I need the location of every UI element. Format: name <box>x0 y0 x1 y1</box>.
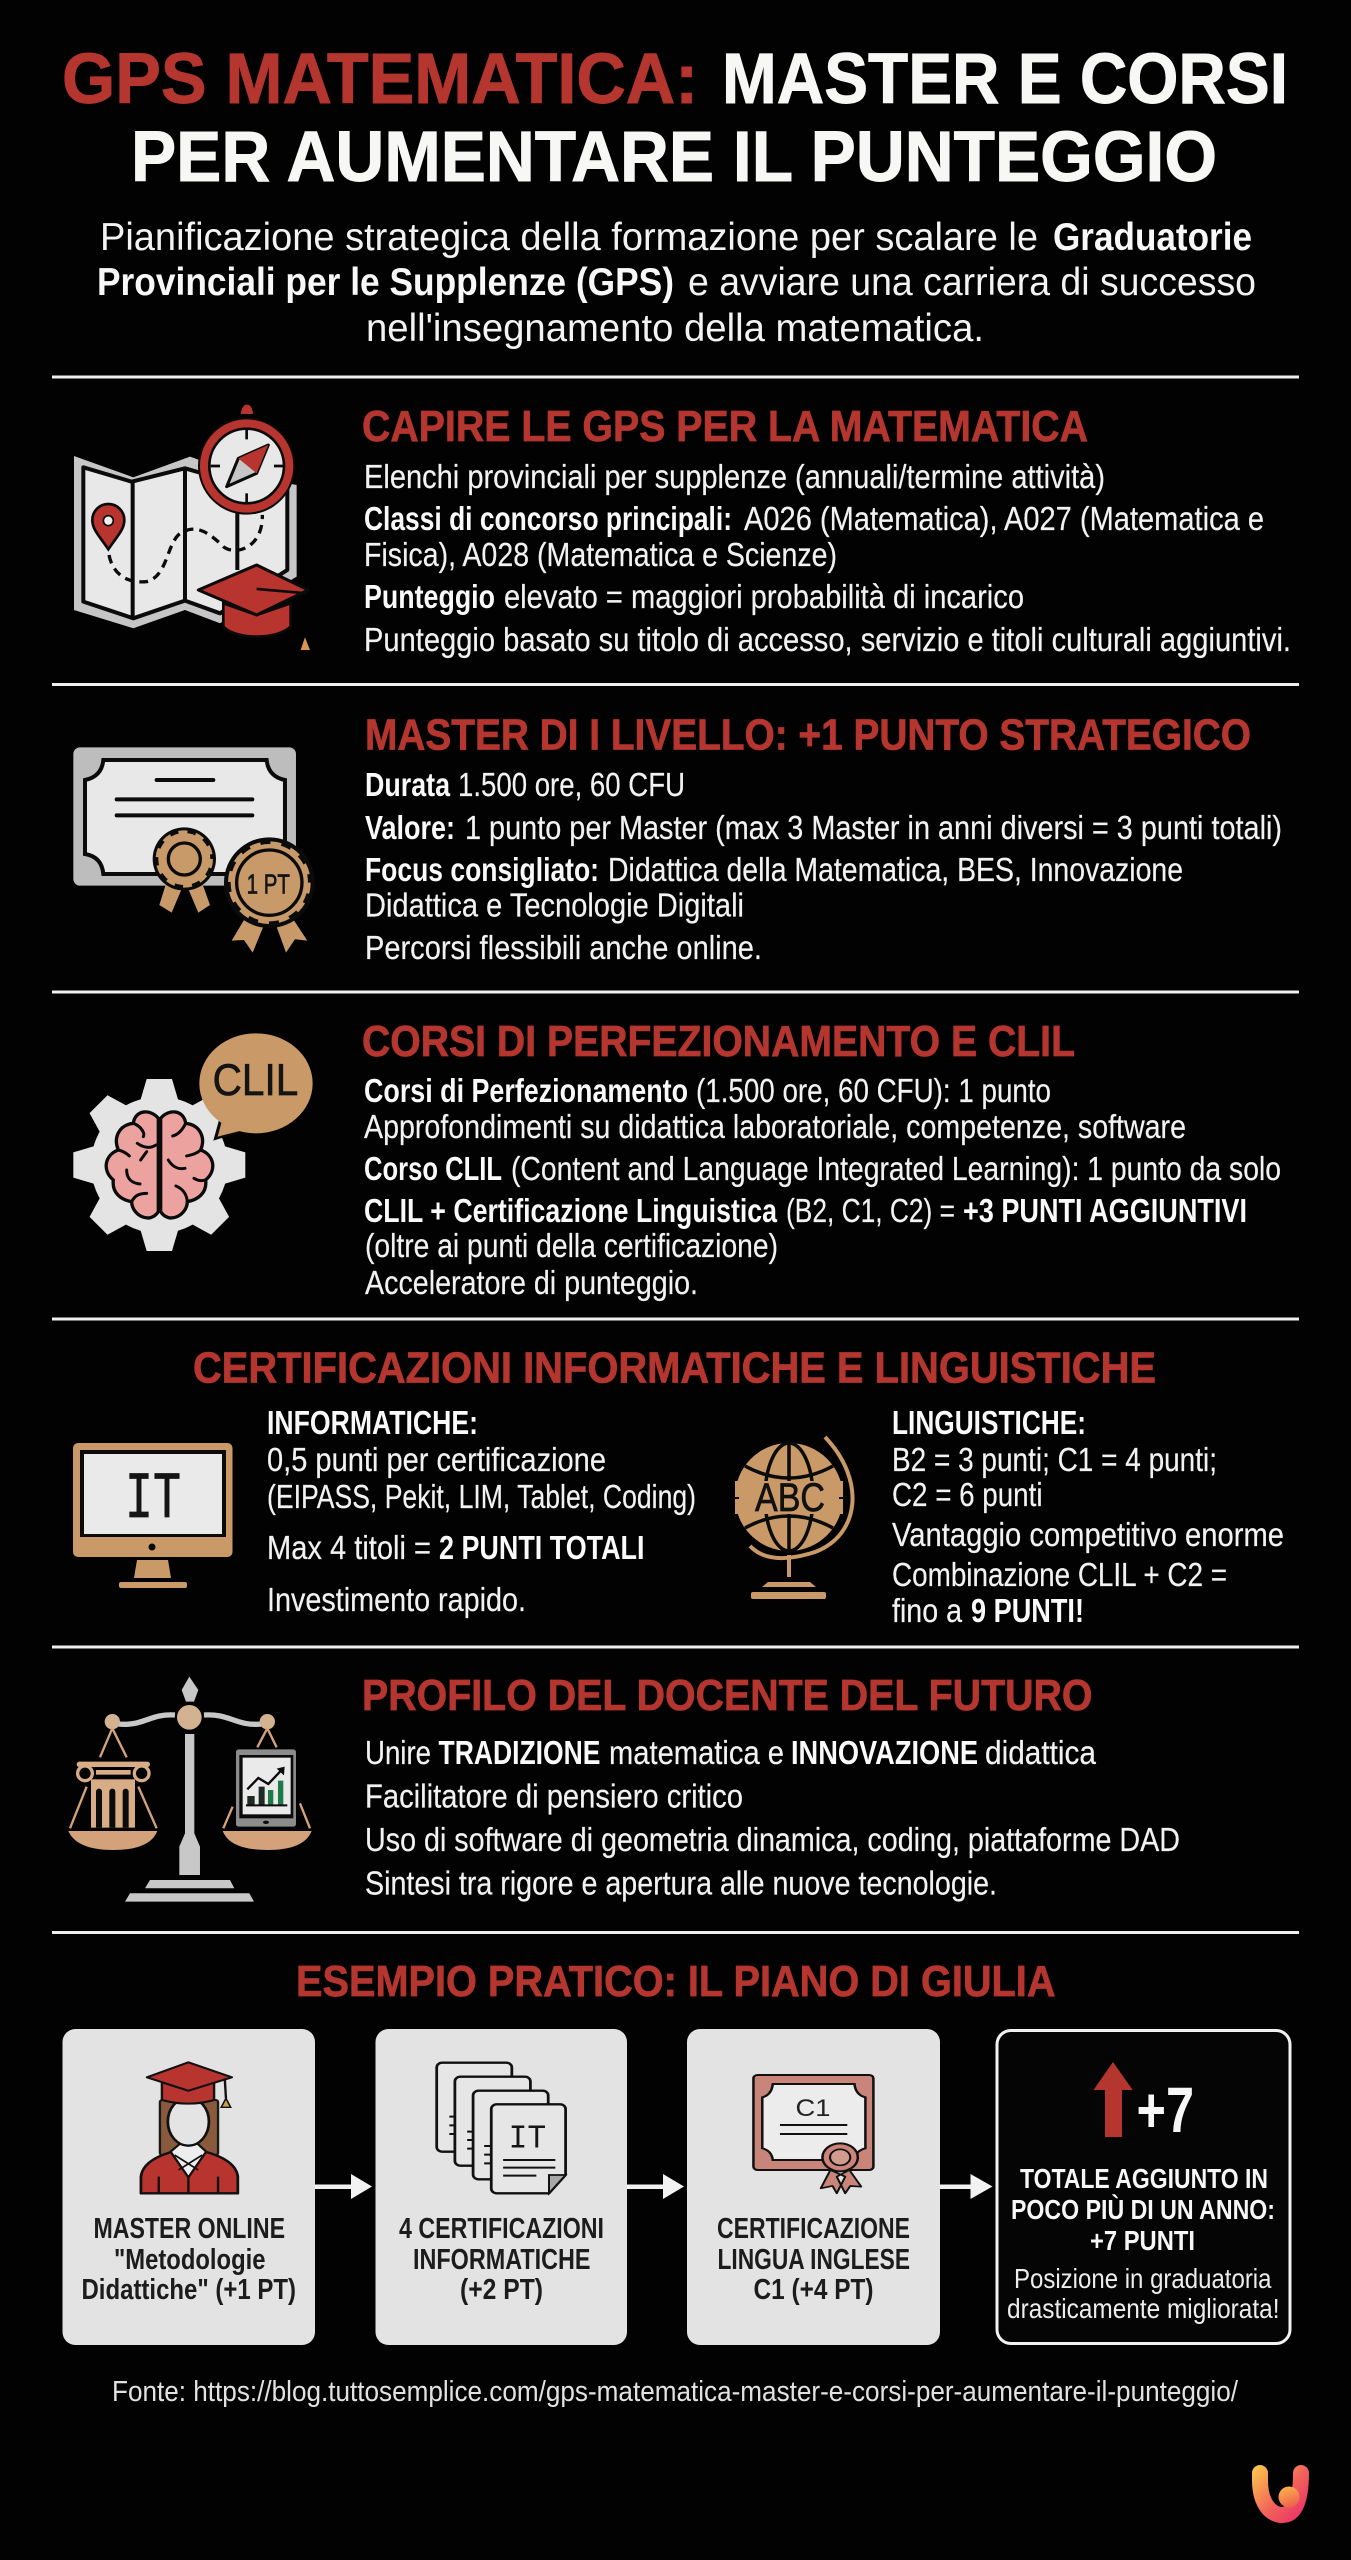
icon: graduate <box>141 2062 238 2193</box>
arrow <box>627 2174 684 2199</box>
text block: Approfondimenti su didattica laboratoriale, competenze, software <box>364 1108 1186 1145</box>
icon: certificate with seals: 1 PT <box>247 868 290 899</box>
total text: POCO PIÙ DI UN ANNO: <box>1011 2194 1275 2225</box>
text block: Didattica e Tecnologie Digitali <box>365 886 744 924</box>
card label: "Metodologie <box>114 2244 266 2276</box>
text block: informatiche: Max 4 titoli = <box>267 1529 431 1566</box>
heading: ESEMPIO PRATICO: IL PIANO DI GIULIA <box>296 1957 1056 2006</box>
icon: stacked documents: IT <box>509 2120 546 2157</box>
title: PER AUMENTARE IL PUNTEGGIO <box>131 118 1217 197</box>
text block: linguistiche: fino a <box>892 1592 963 1629</box>
text block: Elenchi provinciali per supplenze (annuali/termine attività) <box>364 458 1105 495</box>
text block: Durata <box>365 766 451 803</box>
text block: Classi di concorso principali: <box>364 500 732 537</box>
text block: CLIL + Certificazione Linguistica <box>364 1192 778 1229</box>
text block: matematica e <box>609 1734 784 1771</box>
icon: C1 certificate: C1 <box>796 2094 830 2121</box>
panel: corsi di perfezionamento e CLIL <box>73 1017 1281 1301</box>
text block: informatiche <box>267 1404 696 1618</box>
subtitle: e avviare una carriera di successo <box>688 261 1256 304</box>
text block: 1.500 ore, 60 CFU <box>458 766 685 803</box>
text block: linguistiche <box>892 1404 1284 1629</box>
text block: A026 (Matematica), A027 (Matematica e <box>744 500 1264 537</box>
text block: +3 PUNTI AGGIUNTIVI <box>963 1192 1247 1229</box>
subtitle: Pianificazione strategica della formazione per scalare le <box>100 216 1038 259</box>
icon: certificate with seals <box>73 747 315 953</box>
icon: brain in gear with CLIL bubble <box>73 1033 313 1251</box>
text block: informatiche: 2 PUNTI TOTALI <box>439 1529 644 1566</box>
source line: Fonte: https://blog.tuttosemplice.com/gps-matematica-master-e-corsi-per-aumentare-il-punteggio/ <box>112 2376 1239 2408</box>
text block: Sintesi tra rigore e apertura alle nuove tecnologie. <box>365 1864 997 1902</box>
card label: 4 CERTIFICAZIONI <box>399 2213 604 2245</box>
text block: Acceleratore di punteggio. <box>365 1264 698 1301</box>
text block: Punteggio <box>364 578 495 615</box>
arrow <box>940 2174 992 2199</box>
text block: informatiche: Investimento rapido. <box>267 1581 526 1618</box>
total text <box>1007 2163 1280 2324</box>
text block: informatiche: INFORMATICHE: <box>267 1404 478 1441</box>
text block: (1.500 ore, 60 CFU): 1 punto <box>696 1072 1051 1109</box>
title <box>62 40 1288 197</box>
text block: informatiche: (EIPASS, Pekit, LIM, Tablet, Coding) <box>267 1478 696 1515</box>
card label <box>82 2213 296 2306</box>
plus seven: +7 <box>1136 2074 1194 2146</box>
text block: (oltre ai punti della certificazione) <box>365 1227 778 1264</box>
text block: INNOVAZIONE <box>791 1734 978 1771</box>
panel: certificazioni informatiche e linguistiche <box>73 1344 1284 1629</box>
text block: linguistiche: B2 = 3 punti; C1 = 4 punti; <box>892 1441 1217 1478</box>
card: certificazioni informatiche <box>376 2029 627 2345</box>
card label: CERTIFICAZIONE <box>717 2213 910 2245</box>
icon: IT monitor: IT <box>125 1462 181 1537</box>
card label: (+2 PT) <box>460 2274 543 2306</box>
text block: linguistiche: Combinazione CLIL + C2 = <box>892 1556 1227 1593</box>
panel: profilo del docente <box>68 1671 1180 1902</box>
subtitle: Provinciali per le Supplenze (GPS) <box>97 261 674 304</box>
text block: Percorsi flessibili anche online. <box>365 929 762 966</box>
title: GPS MATEMATICA: <box>62 40 698 119</box>
text block <box>365 766 1282 966</box>
text block: Uso di software di geometria dinamica, coding, piattaforme DAD <box>365 1821 1180 1858</box>
icon: balance with column and tablet <box>68 1677 312 1902</box>
icon: brain in gear with CLIL bubble: CLIL <box>213 1056 298 1105</box>
text block <box>364 1072 1281 1301</box>
heading: CAPIRE LE GPS PER LA MATEMATICA <box>362 402 1088 451</box>
card label: MASTER ONLINE <box>94 2213 285 2245</box>
total text: +7 PUNTI <box>1090 2225 1195 2256</box>
card label <box>399 2213 604 2306</box>
text block: linguistiche: 9 PUNTI! <box>971 1592 1084 1629</box>
icon: C1 certificate <box>753 2075 873 2193</box>
icon: ABC globe <box>733 1437 853 1599</box>
panel: capire le GPS <box>74 402 1291 658</box>
text block: informatiche: 0,5 punti per certificazione <box>267 1441 606 1478</box>
total text: Posizione in graduatoria <box>1014 2263 1272 2294</box>
card label: INFORMATICHE <box>413 2244 590 2276</box>
text block <box>365 1734 1180 1902</box>
icon: red up arrow <box>1094 2062 1133 2137</box>
text block: elevato = maggiori probabilità di incarico <box>504 578 1024 615</box>
icon: ABC globe: ABC <box>755 1476 825 1520</box>
icon: map, compass and graduation cap <box>74 405 310 650</box>
card label: C1 (+4 PT) <box>754 2274 874 2306</box>
text block: Valore: <box>365 809 455 846</box>
heading: MASTER DI I LIVELLO: +1 PUNTO STRATEGICO <box>365 710 1251 760</box>
icon: stacked documents <box>437 2063 566 2193</box>
text block: TRADIZIONE <box>438 1734 600 1771</box>
text block: linguistiche: Vantaggio competitivo enorme <box>892 1516 1284 1553</box>
panel: esempio pratico <box>62 1957 1290 2345</box>
text block: Corsi di Perfezionamento <box>364 1072 688 1109</box>
total text: drasticamente migliorata! <box>1007 2293 1280 2324</box>
text block: didattica <box>985 1734 1097 1771</box>
heading: CERTIFICAZIONI INFORMATICHE E LINGUISTICHE <box>193 1344 1156 1392</box>
heading: PROFILO DEL DOCENTE DEL FUTURO <box>362 1671 1092 1720</box>
text block: Corso CLIL <box>364 1150 502 1187</box>
card: master online <box>62 2029 315 2345</box>
text block: Unire <box>365 1734 431 1771</box>
text block: Didattica della Matematica, BES, Innovazione <box>608 851 1183 888</box>
panel: master di I livello <box>73 710 1282 966</box>
subtitle: Graduatorie <box>1053 216 1252 259</box>
arrow <box>315 2174 372 2199</box>
card: totale <box>997 2030 1290 2344</box>
subtitle <box>97 216 1256 350</box>
text block <box>364 458 1291 658</box>
text block: Focus consigliato: <box>365 851 599 888</box>
card label: LINGUA INGLESE <box>718 2244 910 2276</box>
card label: Didattiche" (+1 PT) <box>82 2274 296 2306</box>
title: MASTER E CORSI <box>722 40 1288 119</box>
logo <box>1260 2473 1301 2515</box>
icon: IT monitor <box>73 1443 232 1588</box>
heading: CORSI DI PERFEZIONAMENTO E CLIL <box>362 1017 1075 1066</box>
card label <box>717 2213 910 2306</box>
card: certificazione lingua inglese <box>687 2029 940 2345</box>
text block: (B2, C1, C2) = <box>786 1192 955 1229</box>
text block: Facilitatore di pensiero critico <box>365 1778 743 1814</box>
text block: Fisica), A028 (Matematica e Scienze) <box>364 536 837 573</box>
text block: linguistiche: LINGUISTICHE: <box>892 1404 1086 1441</box>
subtitle: nell'insegnamento della matematica. <box>366 307 984 350</box>
text block: linguistiche: C2 = 6 punti <box>892 1476 1042 1513</box>
total text: TOTALE AGGIUNTO IN <box>1020 2163 1268 2194</box>
